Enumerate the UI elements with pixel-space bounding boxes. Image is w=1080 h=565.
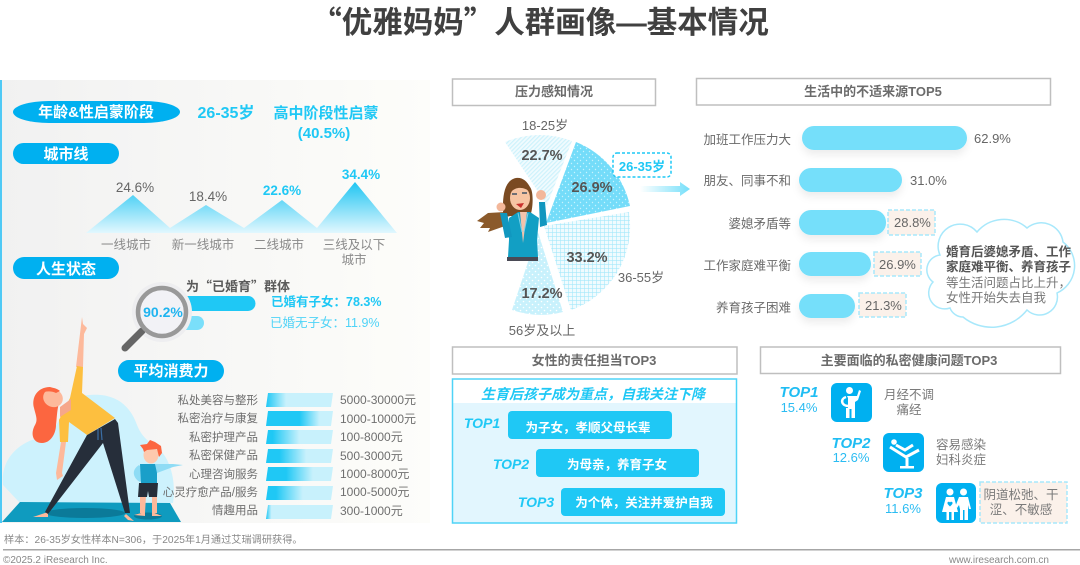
heading: stress perception: 压力感知情况: [515, 84, 593, 99]
heading: private health problems: 主要面临的私密健康问题TOP3: [821, 353, 997, 368]
heading pill: life status: 人生状态: [36, 260, 96, 278]
chart: average spending list: 1000-8000元: [340, 467, 409, 481]
chart: stress pie by age: 56岁及以上: [509, 323, 575, 338]
callout: 26-35 age: 26-35岁: [619, 159, 665, 174]
panel: responsibility TOP3: TOP1: [464, 415, 500, 431]
chart: city tier mountains: 34.4%: [342, 167, 380, 182]
chart: discomfort TOP5 bars: [703, 126, 1011, 318]
chart: average spending list: 1000-10000元: [340, 412, 416, 426]
panel: responsibility TOP3: 为子女，孝顺父母长辈: [525, 420, 651, 435]
heading pill: life status: [13, 257, 119, 279]
heading: female responsibility: [452, 347, 737, 374]
age and enlightenment stats: [198, 104, 379, 142]
footer: [3, 549, 1080, 565]
callout: cloud note: 等生活问题占比上升，: [946, 275, 1071, 290]
illustration: cheering woman: [477, 178, 547, 261]
panel: responsibility TOP3: [452, 379, 736, 523]
age and enlightenment stats: 高中阶段性启蒙: [273, 104, 379, 122]
heading pill: spending: 平均消费力: [133, 362, 209, 380]
panel: responsibility TOP3: TOP2: [493, 456, 529, 472]
list item: health TOP3: [884, 482, 1067, 523]
chart: discomfort TOP5 bars: 31.0%: [910, 173, 947, 188]
panel: responsibility TOP3: TOP3: [518, 494, 554, 510]
chart: discomfort TOP5 bars: 朋友、同事不和: [703, 174, 791, 188]
life status bars and labels: 已婚有子女：78.3%: [271, 294, 381, 309]
chart: stress pie by age: [505, 118, 664, 338]
heading pill: spending: [118, 360, 224, 382]
chart: stress pie by age: 36-55岁: [618, 270, 664, 285]
list item: health TOP1: [780, 383, 934, 422]
chart: discomfort TOP5 bars: 养育孩子困难: [716, 300, 791, 315]
heading: female responsibility: 女性的责任担当TOP3: [532, 353, 656, 368]
chart: discomfort TOP5 bars: 加班工作压力大: [703, 133, 791, 147]
chart: stress pie by age: 26.9%: [571, 180, 613, 196]
life status bars and labels: [170, 276, 381, 330]
chart: average spending list: 情趣用品: [212, 503, 258, 517]
heading: discomfort sources: 生活中的不适来源TOP5: [804, 84, 942, 99]
callout: cloud note: 婚育后婆媳矛盾、工作: [946, 244, 1072, 259]
chart: stress pie by age: 22.7%: [521, 148, 563, 164]
illustration: yoga mother and child: [2, 317, 183, 522]
chart: stress pie by age: 33.2%: [566, 250, 608, 266]
list item: health TOP2: [832, 433, 986, 472]
heading: stress perception: [452, 79, 656, 106]
chart: city tier mountains: 18.4%: [189, 189, 227, 204]
list item: health TOP3: TOP3: [884, 485, 923, 502]
callout: 26-35 age: [613, 153, 671, 177]
list item: health TOP1: TOP1: [780, 384, 818, 401]
footnote: sample: 样本：26-35岁女性样本N=306，于2025年1月通过艾瑞调研获得。: [4, 533, 303, 546]
chart: discomfort TOP5 bars: 21.3%: [865, 298, 902, 313]
heading pill: age: 年龄&性启蒙阶段: [38, 103, 154, 121]
chart: average spending list: 1000-5000元: [340, 485, 409, 499]
heading: private health problems: [760, 347, 1060, 374]
chart: average spending list: 私密治疗与康复: [178, 411, 258, 425]
list item: health TOP3: 涩、不敏感: [990, 502, 1052, 517]
icon: magnifier 90.2%: 90.2%: [143, 304, 183, 320]
chart: city tier mountains: 二线城市: [254, 237, 304, 252]
list item: health TOP3: 阴道松弛、干: [983, 488, 1059, 502]
chart: average spending list: 500-3000元: [340, 449, 403, 463]
chart: stress pie by age: 17.2%: [521, 286, 563, 302]
chart: stress pie by age: 18-25岁: [522, 118, 568, 133]
chart: average spending list: 心理咨询服务: [189, 467, 258, 481]
chart: city tier mountains: 一线城市: [101, 237, 151, 252]
list item: health TOP1: 痛经: [896, 402, 922, 417]
list item: health TOP1: 月经不调: [884, 388, 934, 402]
chart: average spending list: [163, 393, 416, 519]
chart: city tier mountains: 新一线城市: [172, 237, 234, 252]
life status bars and labels: 已婚无子女：11.9%: [270, 315, 380, 330]
arrow: pie to discomfort sources: [640, 182, 690, 196]
chart: discomfort TOP5 bars: 工作家庭难平衡: [703, 258, 791, 273]
list item: health TOP2: TOP2: [832, 435, 871, 452]
chart: city tier mountains: 22.6%: [263, 183, 301, 198]
chart: average spending list: 私处美容与整形: [178, 393, 258, 407]
chart: discomfort TOP5 bars: 28.8%: [894, 215, 931, 230]
chart: average spending list: 私密保健产品: [189, 448, 258, 462]
heading pill: city tier: 城市线: [43, 145, 89, 163]
list item: health TOP3: 11.6%: [885, 501, 921, 516]
life status bars and labels: 为“已婚育”群体: [186, 276, 290, 295]
heading: discomfort sources: [696, 78, 1050, 105]
list item: health TOP2: 妇科炎症: [936, 452, 986, 467]
chart: city tier mountains: [86, 167, 397, 267]
panel: left profile background: [0, 80, 430, 523]
chart: average spending list: 100-8000元: [340, 430, 403, 444]
chart: discomfort TOP5 bars: 26.9%: [879, 257, 916, 272]
age and enlightenment stats: 26-35岁: [198, 104, 254, 122]
panel: responsibility TOP3: 为母亲，养育子女: [567, 457, 667, 472]
heading pill: city tier: [13, 143, 119, 164]
callout: cloud note: 女性开始失去自我: [946, 290, 1047, 305]
icon: magnifier 90.2%: [125, 282, 192, 348]
list item: health TOP2: 12.6%: [833, 450, 870, 465]
chart: discomfort TOP5 bars: 62.9%: [974, 131, 1011, 146]
chart: average spending list: 5000-30000元: [340, 393, 416, 407]
chart: average spending list: 私密护理产品: [189, 430, 258, 444]
panel: responsibility TOP3: 为个体，关注并爱护自我: [575, 495, 713, 510]
list item: health TOP1: 15.4%: [781, 400, 818, 415]
chart: city tier mountains: 三线及以下: [323, 238, 385, 252]
panel: responsibility TOP3: 生育后孩子成为重点，自我关注下降: [481, 386, 707, 402]
list item: health TOP2: 容易感染: [936, 437, 986, 452]
age and enlightenment stats: (40.5%): [298, 125, 350, 142]
chart: city tier mountains: 24.6%: [116, 180, 154, 195]
chart: discomfort TOP5 bars: 婆媳矛盾等: [728, 216, 791, 231]
callout: cloud note: [927, 219, 1075, 327]
heading pill: age: [13, 101, 180, 123]
callout: cloud note: 家庭难平衡、养育孩子: [946, 259, 1071, 274]
chart: average spending list: 心灵疗愈产品/服务: [163, 485, 258, 499]
chart: city tier mountains: 城市: [341, 252, 367, 267]
chart: average spending list: 300-1000元: [340, 504, 403, 518]
